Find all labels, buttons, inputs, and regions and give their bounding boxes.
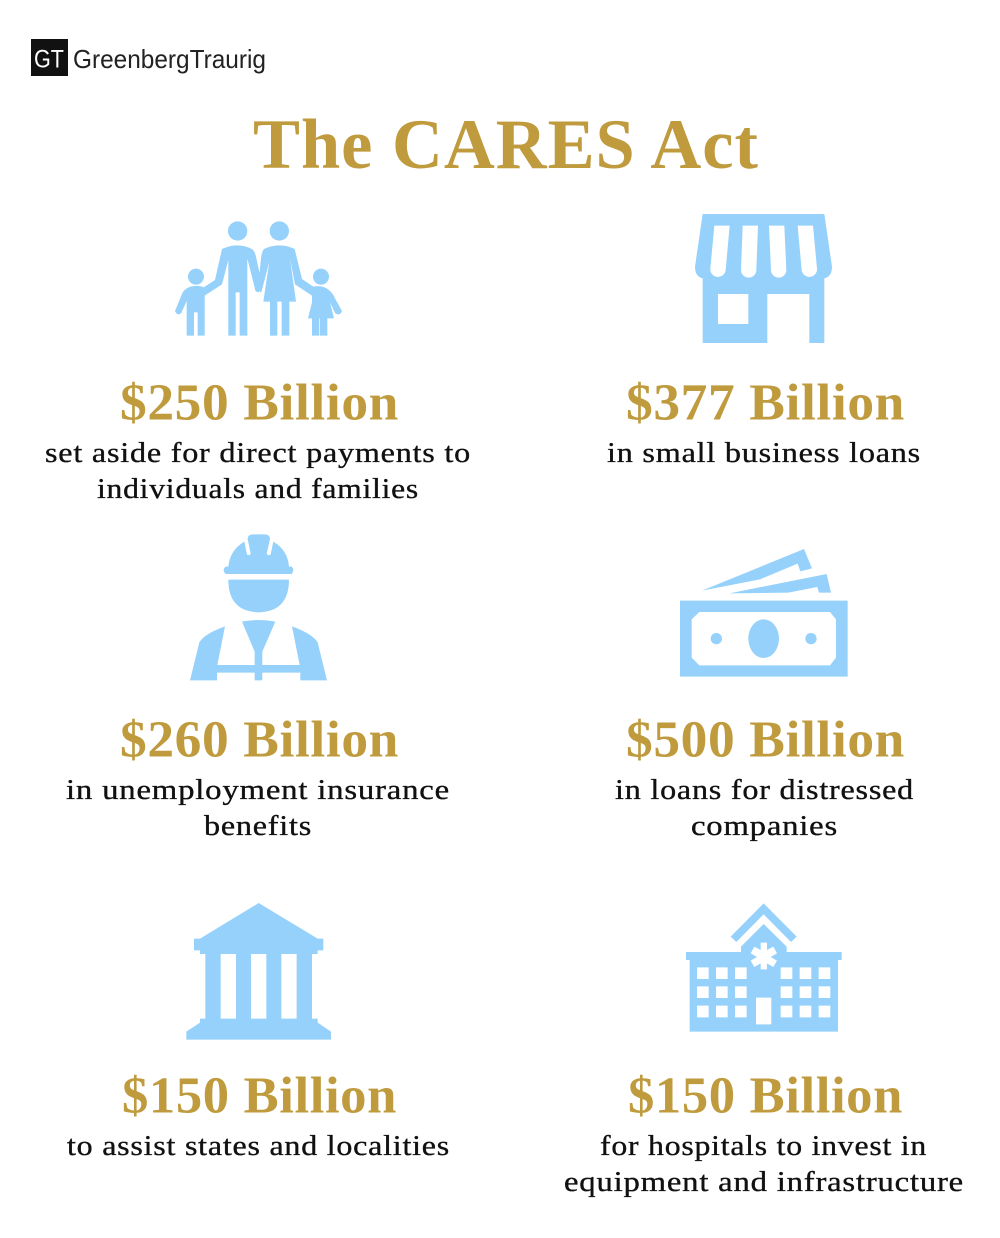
panel: hospitals [564, 903, 964, 1198]
icon: construction worker [190, 534, 327, 680]
panel: states and localities [67, 903, 450, 1162]
description: benefits [204, 810, 312, 842]
description [66, 774, 450, 842]
amount: $150 Billion [122, 1068, 397, 1124]
amount: $377 Billion [626, 374, 905, 432]
panel: unemployment insurance [66, 534, 450, 842]
description: individuals and families [97, 473, 419, 505]
icon: family [175, 221, 342, 336]
description: equipment and infrastructure [564, 1166, 964, 1198]
amount: $260 Billion [120, 712, 399, 768]
icon: banknotes [680, 549, 848, 677]
title: The CARES Act [253, 106, 759, 184]
description: in small business loans [607, 437, 921, 469]
description [45, 437, 471, 505]
description: to assist states and localities [67, 1130, 450, 1162]
logo: Greenberg Traurig: GT [34, 46, 64, 74]
icon: storefront [695, 214, 832, 343]
description: in loans for distressed [615, 774, 914, 806]
description: set aside for direct payments to [45, 437, 471, 469]
amount: $150 Billion [628, 1068, 903, 1124]
icon: hospital [686, 903, 842, 1032]
panel: distressed companies [615, 549, 914, 842]
logo: Greenberg Traurig: GreenbergTraurig [73, 44, 266, 74]
amount: $500 Billion [626, 712, 905, 768]
description [615, 774, 914, 842]
icon: government building [186, 903, 331, 1040]
description: for hospitals to invest in [600, 1130, 927, 1162]
description: in unemployment insurance [66, 774, 450, 806]
panel: small business loans [607, 214, 921, 469]
amount: $250 Billion [120, 374, 399, 432]
description: companies [691, 810, 838, 842]
description [564, 1130, 964, 1198]
panel: direct payments [45, 221, 471, 505]
logo: Greenberg Traurig [31, 39, 266, 76]
